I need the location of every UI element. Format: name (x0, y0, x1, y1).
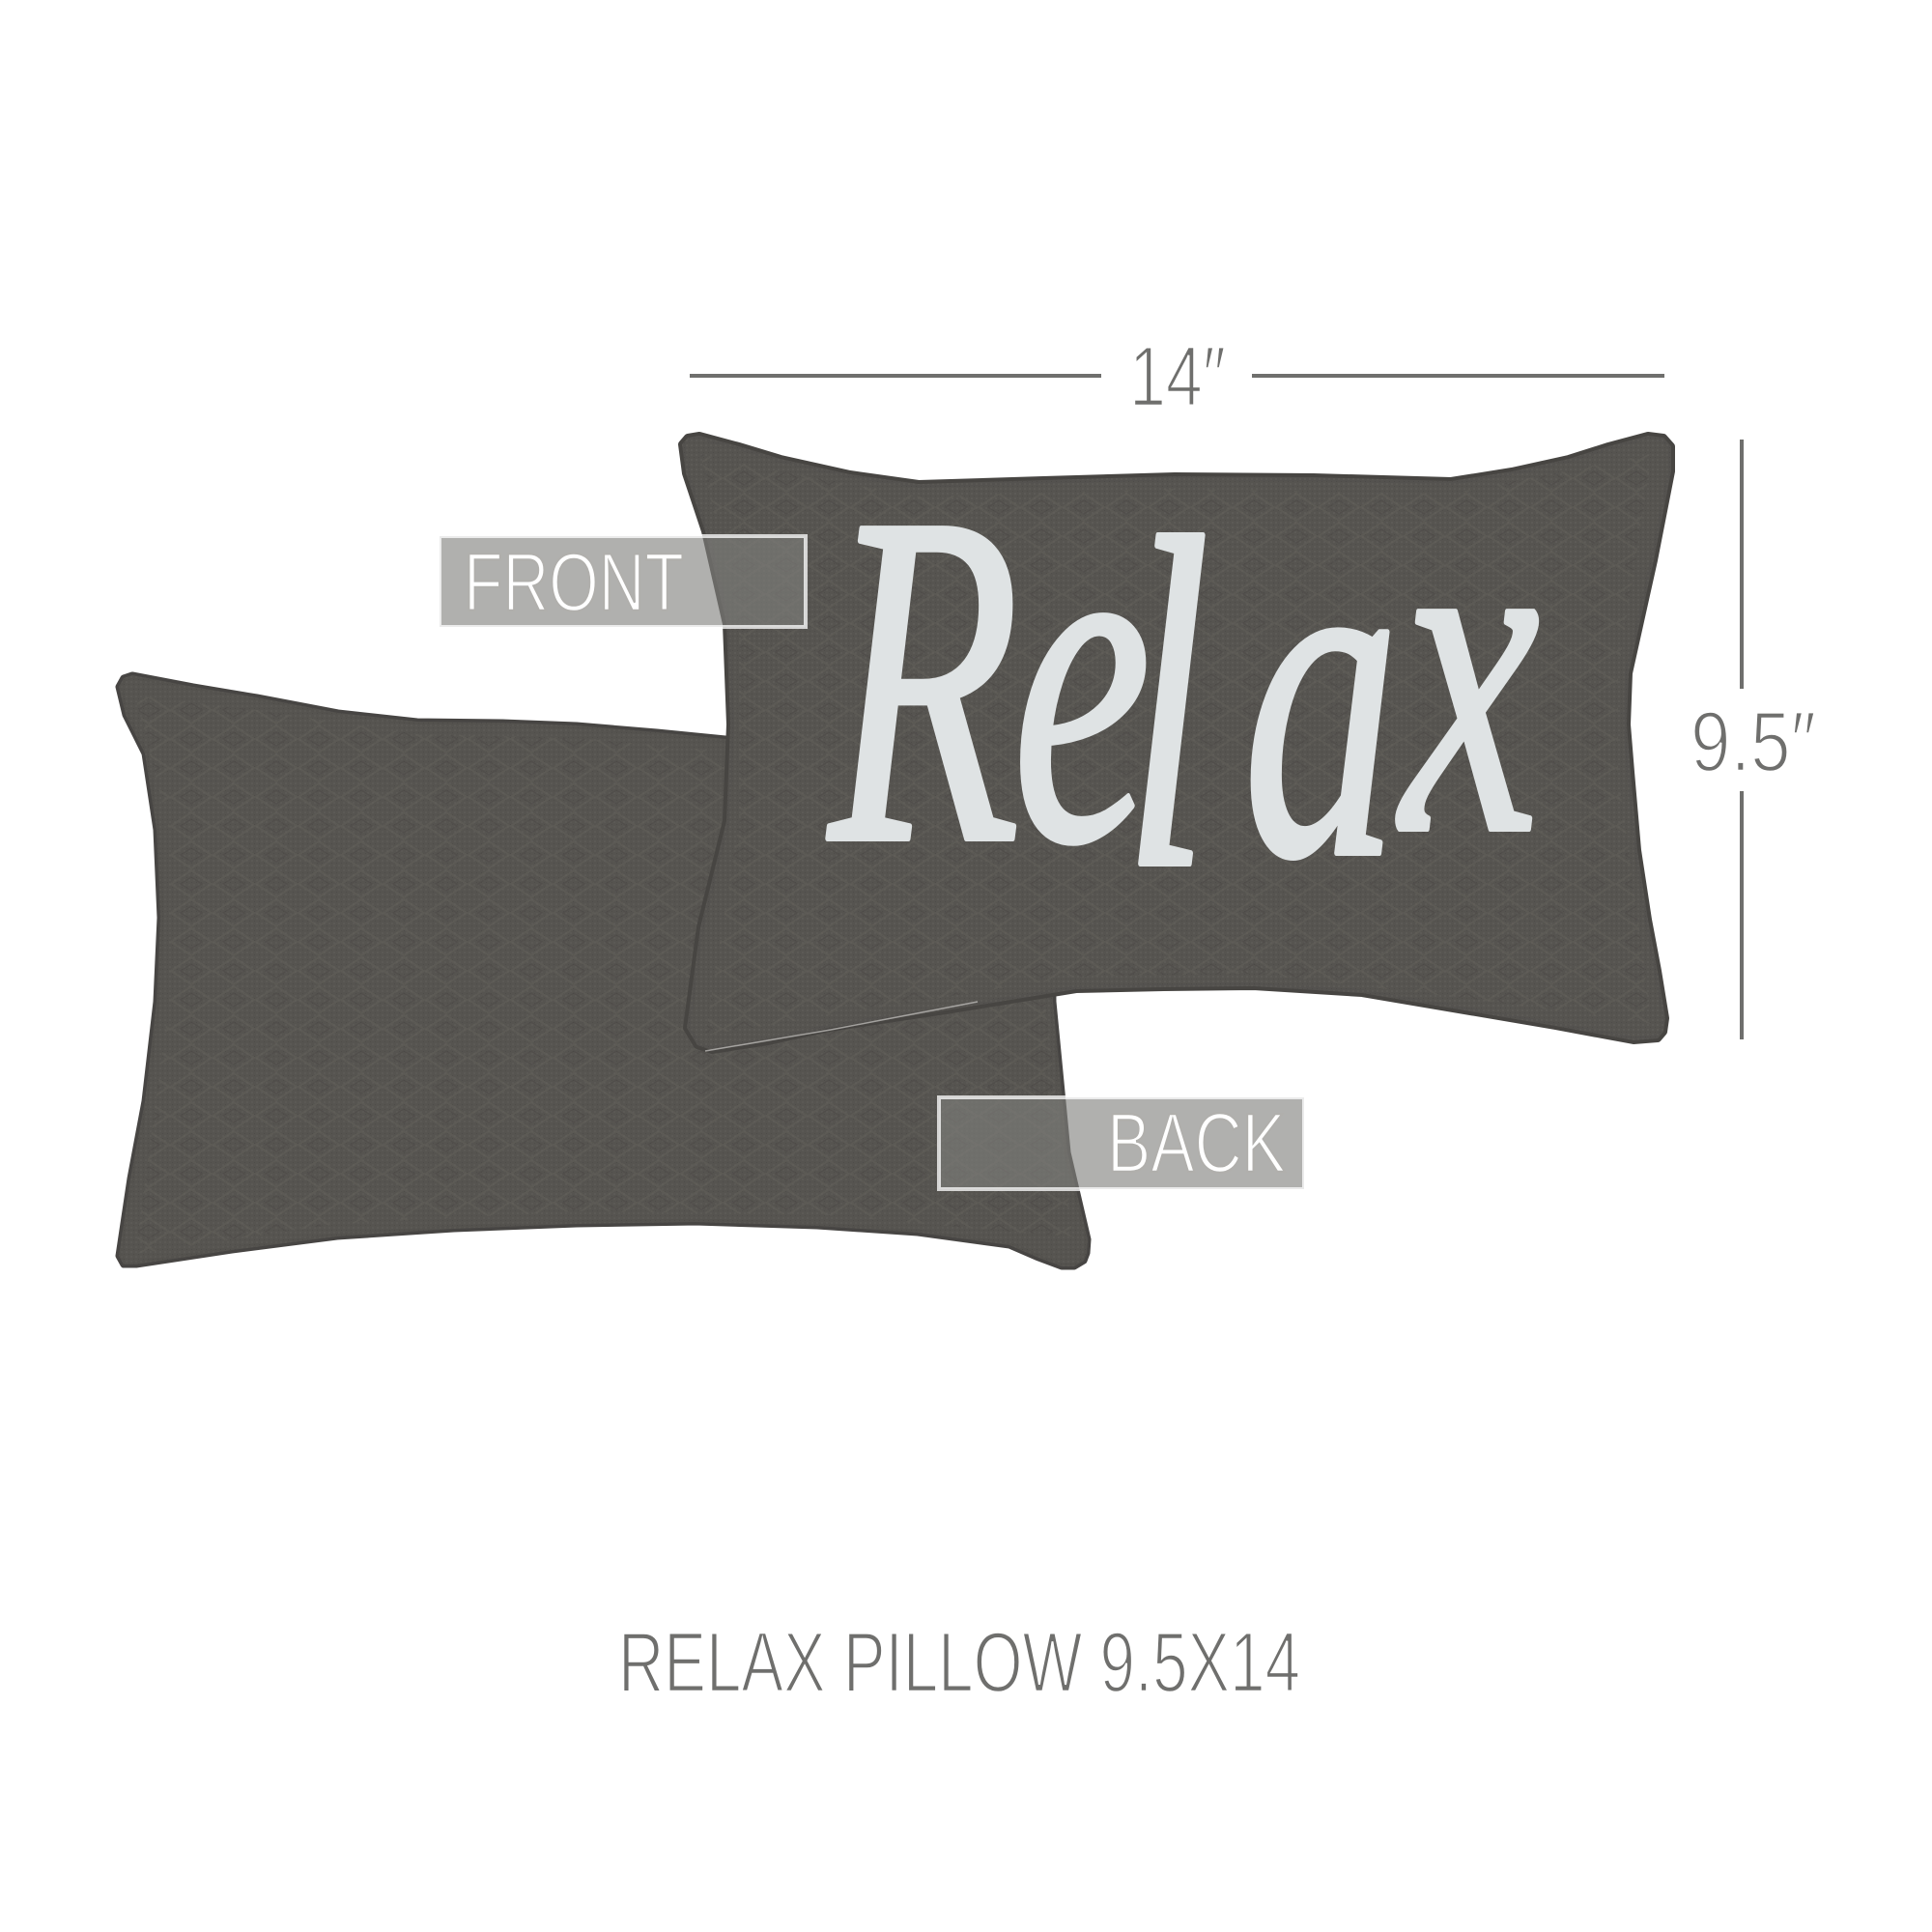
label: front: FRONT (464, 537, 684, 629)
pillow lettering: Relax: Relax (824, 407, 1540, 966)
front pillow (682, 436, 1671, 1051)
product title: RELAX PILLOW 9.5X14 (618, 1614, 1300, 1710)
label: back: BACK (1107, 1096, 1286, 1190)
height dimension: 9.5 inches: 9.5″ (1690, 694, 1816, 789)
back pillow (119, 675, 1088, 1266)
width dimension: 14 inches (690, 328, 1664, 424)
width dimension: 14 inches: 14″ (1129, 328, 1226, 424)
height dimension: 9.5 inches (1690, 440, 1816, 1039)
seam highlight (705, 1002, 978, 1051)
label: back (939, 1096, 1304, 1190)
